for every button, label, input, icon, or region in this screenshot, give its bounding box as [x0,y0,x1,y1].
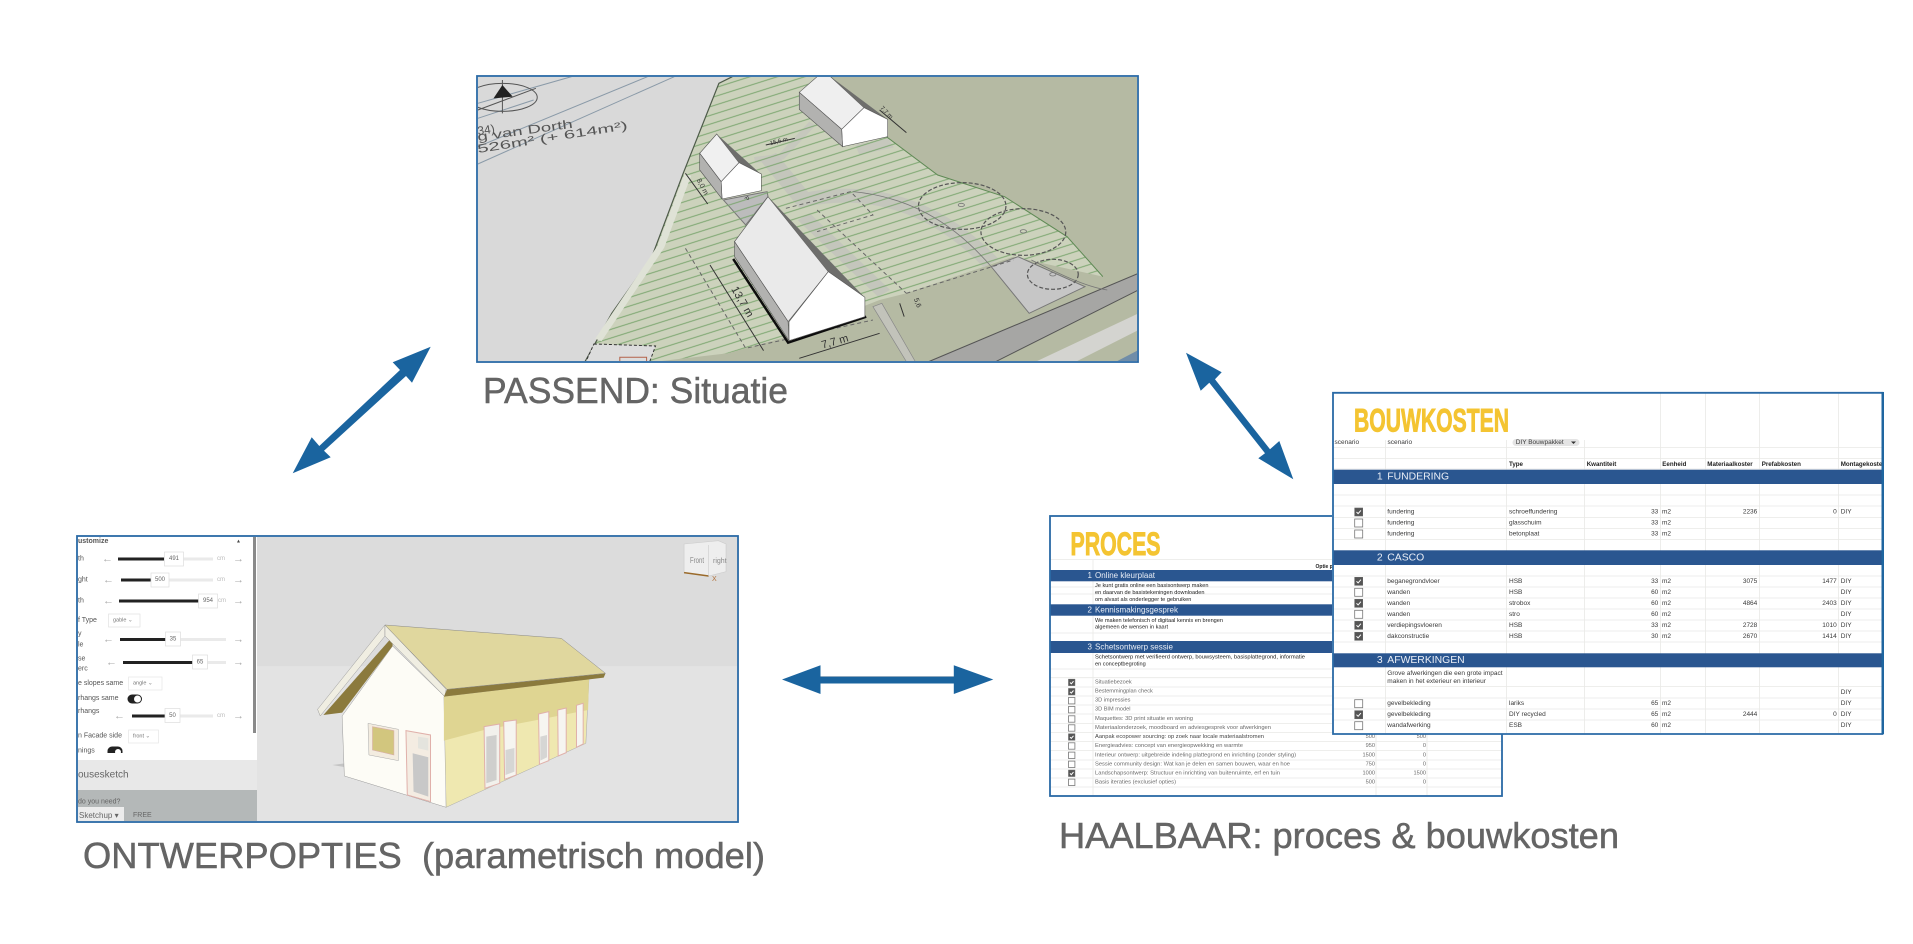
setting: facade side: n Facade side [78,732,122,740]
band 1: 1 [1088,571,1093,580]
section: fundering: 33 [1651,520,1659,526]
band 1 [1050,570,1332,602]
scenario row [1334,439,1580,446]
setting: slopes same: e slopes same [78,680,123,687]
section: casco: wanden [1386,600,1410,607]
section: casco [1333,550,1882,640]
section: afwerkingen: DIY [1841,711,1852,718]
section: casco: DIY [1841,633,1852,640]
section: afwerkingen: gevelbekleding [1387,711,1431,718]
band 2: Kennismakingsgesprek [1095,606,1179,615]
section: casco: DIY [1841,622,1852,629]
checklist: Situatiebezoek [1095,679,1132,685]
arrow: model to process [782,665,993,694]
house: top [799,77,888,147]
slider: height: ght [78,576,88,584]
slider: width [78,552,244,566]
section: fundering: glasschuim [1509,520,1542,526]
band 1: Online kleurplaat [1095,571,1156,580]
plan text: plot label: 34) [476,122,496,138]
column headers [1509,462,1882,468]
section: afwerkingen: wandafwerking [1386,722,1431,729]
panel: PROCES sheet [1049,515,1503,797]
slider: height: ← [103,574,114,586]
section: afwerkingen: 60 [1651,722,1659,729]
checklist: Aanpak ecopower sourcing: op zoek naar locale materiaalstromen [1095,734,1264,740]
checklist [1068,679,1296,786]
slider: ridge percentage: se [78,656,86,662]
scenario row: DIY Bouwpakket [1516,439,1564,446]
column headers: Materiaalkoster [1707,461,1753,468]
plan text: dimensions: 15,6 m [769,137,789,147]
section: casco: DIY [1841,600,1852,607]
section: fundering: 2236 [1743,508,1758,516]
checklist: Basis iteraties (exclusief opties) [1095,779,1176,785]
slider: overhangs [78,708,244,722]
tree circles [918,183,1078,289]
column headers: Prefabkosten [1762,461,1801,468]
section: fundering: fundering [1387,508,1415,516]
checklist: Bestemmingplan check [1095,689,1153,695]
section: casco: 2728 [1743,622,1758,629]
slider: roof angle: 35 [170,636,177,642]
plan text: plot label: g van Dorth [476,117,573,144]
checklist: Maquettes: 3D print situatie en woning [1095,716,1193,722]
price columns: 0 [1423,779,1426,785]
section: casco: 33 [1651,578,1659,585]
checklist: Landschapsontwerp: Structuur en inrichting van buitenruimte, erf en tuin [1095,770,1280,776]
section: casco: 4864 [1743,600,1758,607]
setting: facade side [78,730,158,743]
section: casco: 2403 [1822,600,1837,607]
plan text: dimensions: 13,7 m [728,284,756,320]
arrow: model to situation [293,347,431,473]
slider: roof angle [78,632,242,646]
section: casco: CASCO [1387,552,1424,563]
checklist: Materiaalonderzoek, moodboard en adviesgesprek voor afwerkingen [1095,725,1271,731]
drawing: lot and surroundings [468,77,1141,363]
section: casco: HSB [1509,633,1522,640]
checklist: 3D impressies [1095,698,1131,704]
sidebar [78,537,257,822]
model house [318,625,606,807]
panel: parametric model: X [712,576,717,583]
setting: facade side: front ⌄ [133,734,150,740]
section: fundering: 0 [1833,508,1837,516]
section: fundering: m2 [1662,508,1671,516]
slider: roof angle: → [233,634,244,646]
slider: overhangs: → [233,710,244,722]
house: middle [700,134,761,199]
section: casco: wanden [1386,589,1410,596]
setting: slopes same [78,677,162,690]
slider: overhangs: rhangs [78,708,100,715]
section: casco: DIY [1841,589,1852,596]
caption: ONTWERPOPTIES: ONTWERPOPTIES (parametrisch model) [83,835,765,876]
caption: HAALBAAR: HAALBAAR: proces & bouwkosten [1059,815,1619,856]
house: large [733,197,866,343]
slider: ridge percentage: 65 [197,660,204,666]
section: afwerkingen: 2444 [1743,711,1758,718]
section: afwerkingen: DIY [1841,722,1852,729]
section: fundering: 1 [1377,472,1383,482]
slider: length: 954 [203,598,214,604]
section: casco: strobox [1509,600,1531,607]
slider: width: → [233,553,244,565]
select: roof type [78,614,140,627]
slider: ridge percentage: ← [106,656,117,668]
section: casco: HSB [1509,578,1522,585]
plan text: dimensions: 7,7 m [879,106,893,120]
section: fundering: 33 [1651,508,1659,516]
section: fundering: fundering [1387,530,1415,538]
section: casco: 1010 [1822,622,1837,629]
plan text: dimensions: P [742,196,750,202]
slider: roof angle: ← [103,634,114,646]
price columns: 500 [1366,734,1375,740]
slider: length [78,594,244,608]
sidebar: ▲ [236,538,241,544]
select: roof type: f Type [78,617,97,624]
arrow: situation to costs [1186,353,1293,479]
checklist: Sessie community design: Wat kan je delen en samen bouwen, waar en hoe [1095,761,1290,767]
section: afwerkingen: AFWERKINGEN [1387,655,1465,666]
section: casco: 2 [1377,552,1383,563]
band 1: en daarvan de basistekeningen downloaden [1095,590,1204,596]
section: afwerkingen: 65 [1651,700,1659,707]
slider: overhangs: ← [114,710,125,722]
section: casco: 60 [1651,600,1659,607]
slider: width: th [78,556,84,562]
slider: roof angle: y [78,630,82,638]
checklist: 3D BIM model [1095,707,1130,713]
select: roof type: gable ⌄ [113,618,133,624]
sidebar: Sketchup ▾ [79,811,119,820]
section: casco: 60 [1651,589,1659,596]
band 2: 2 [1088,606,1093,615]
section: casco: m2 [1662,633,1671,640]
plan text: dimensions: 7,7 m [820,332,850,352]
section: casco: m2 [1662,589,1671,596]
section: afwerkingen: DIY [1841,700,1852,707]
section: afwerkingen: Grove afwerkingen die een grote impact [1387,670,1503,677]
section: afwerkingen: lariks [1509,700,1525,707]
sidebar: ustomize [78,538,108,545]
section: afwerkingen: m2 [1662,722,1671,729]
column headers: Type [1509,461,1524,468]
plan text: dimensions [695,106,922,352]
plan text: dimensions: 8,0 m [695,178,709,197]
price columns [1363,734,1426,785]
title: PROCES [1070,526,1160,562]
section: afwerkingen: DIY [1841,689,1852,696]
section: casco: beganegrondvloer [1387,578,1441,585]
slider: ridge percentage: → [233,656,244,668]
setting: openings toggle [78,746,122,754]
scenario row: scenario [1334,439,1359,446]
sidebar footer: ousesketch [78,770,129,780]
band 3: Schetsontwerp met verifieerd ontwerp, bouwsysteem, basisplattegrond, informatie [1095,654,1305,660]
column headers: Kwantiteit [1587,461,1616,468]
section: fundering: m2 [1662,530,1671,538]
slider: length: cm [218,598,226,604]
section: casco: 33 [1651,622,1659,629]
section: afwerkingen: m2 [1662,711,1671,718]
slider: width: ← [102,553,113,565]
section: afwerkingen: gevelbekleding [1387,700,1431,707]
setting: overhangs same [78,694,142,704]
slider: roof angle: le [78,642,84,648]
setting: slopes same: angle ⌄ [133,680,153,686]
scenario row: scenario [1388,439,1412,446]
slider: height: → [233,574,244,586]
slider: ridge percentage: erc [78,666,88,672]
band 2 [1050,604,1332,630]
slider: ridge percentage [78,655,244,672]
section: casco: HSB [1509,622,1522,629]
section: casco: dakconstructie [1387,633,1430,640]
section: fundering: DIY [1841,508,1852,516]
section: casco: 30 [1651,633,1659,640]
section: afwerkingen: m2 [1662,700,1671,707]
section: casco: m2 [1662,600,1671,607]
section: casco: m2 [1662,611,1671,618]
section: casco: wanden [1386,611,1410,618]
band 3: en conceptbegroting [1095,662,1146,668]
band 1: om alvast als onderlegger te gebruiken [1095,597,1191,603]
plan text: dimensions: 5,6 [912,297,922,309]
price columns: 1000 [1363,770,1375,776]
price columns: 0 [1423,752,1426,758]
setting: overhangs same: rhangs same [78,695,119,702]
panel: PROCES sheet: Optie prijs [1316,564,1340,570]
plan text: plot label [478,120,626,152]
section: casco: verdiepingsvloeren [1387,622,1442,629]
checklist: Interieur ontwerp: uitgebreide indeling plattegrond en inrichting (zonder styling) [1095,752,1296,758]
section: casco: 1477 [1822,578,1837,585]
band 2: We maken telefonisch of digitaal kennis en brengen [1095,618,1223,624]
section: fundering: m2 [1662,520,1671,526]
section: casco: DIY [1841,578,1852,585]
view cube [684,541,726,576]
band 3 [1050,641,1332,666]
section: casco: 3075 [1743,578,1758,585]
section: fundering: betonplaat [1509,530,1540,538]
slider: overhangs: cm [217,713,225,719]
section: casco: stro [1509,611,1520,618]
section: afwerkingen: DIY recycled [1509,711,1546,718]
section: casco: DIY [1841,611,1852,618]
section: casco: 2670 [1743,633,1758,640]
section: afwerkingen: 0 [1833,711,1837,718]
panel: parametric model: Front [690,556,705,565]
price columns: 500 [1366,779,1375,785]
band 2: algemeen de wensen in kaart [1095,625,1169,631]
panel: parametric model: right [713,558,727,565]
section: fundering: schroeffundering [1509,508,1558,516]
section: afwerkingen [1333,653,1882,730]
slider: height [78,573,244,587]
sidebar: do you need? [78,798,121,806]
price columns: 750 [1366,761,1375,767]
section: casco: m2 [1662,622,1671,629]
section: fundering [1333,470,1882,538]
column headers: Montagekosten [1841,461,1886,468]
column headers: Eenheid [1662,461,1687,468]
slider: length: ← [103,595,114,607]
section: afwerkingen: 65 [1651,711,1659,718]
slider: length: th [78,598,84,604]
sidebar: FREE [133,812,152,819]
price columns: 500 [1417,734,1426,740]
price columns: 1500 [1414,770,1426,776]
price columns: 0 [1423,743,1426,749]
3D viewport [256,535,741,823]
slider: length: → [233,595,244,607]
slider: height: cm [217,577,225,583]
section: afwerkingen: 3 [1377,655,1383,666]
band 3: 3 [1088,642,1093,652]
section: casco: HSB [1509,589,1522,596]
section: afwerkingen: maken in het exterieur en interieur [1387,678,1487,685]
panel: parametric model [76,535,741,823]
title: BOUWKOSTEN [1354,403,1509,439]
section: fundering: 33 [1651,530,1659,538]
price columns: 0 [1423,761,1426,767]
slider: width: cm [217,556,225,562]
plan text: plot label: 526m² (+ 614m²) [476,118,629,156]
price columns: 950 [1366,743,1375,749]
section: casco: 1414 [1822,633,1837,640]
slider: height: 500 [155,577,166,583]
section: casco: m2 [1662,578,1671,585]
section: fundering: fundering [1387,520,1415,526]
checklist: Energieadvies: concept van energieopwekking en warmte [1095,743,1243,749]
slider: overhangs: 50 [169,713,176,719]
caption: PASSEND: PASSEND: Situatie [483,370,788,411]
setting: openings toggle: nings [78,748,95,754]
section: afwerkingen: ESB [1509,722,1522,729]
slider: width: 491 [169,556,180,562]
panel: BOUWKOSTEN sheet [1332,392,1886,734]
section: fundering: FUNDERING [1387,472,1449,482]
panel: site plan situation [468,75,1141,363]
band 1: Je kunt gratis online een basisontwerp maken [1095,583,1208,589]
section: casco: 60 [1651,611,1659,618]
price columns: 1500 [1363,752,1375,758]
band 3: Schetsontwerp sessie [1095,642,1174,652]
